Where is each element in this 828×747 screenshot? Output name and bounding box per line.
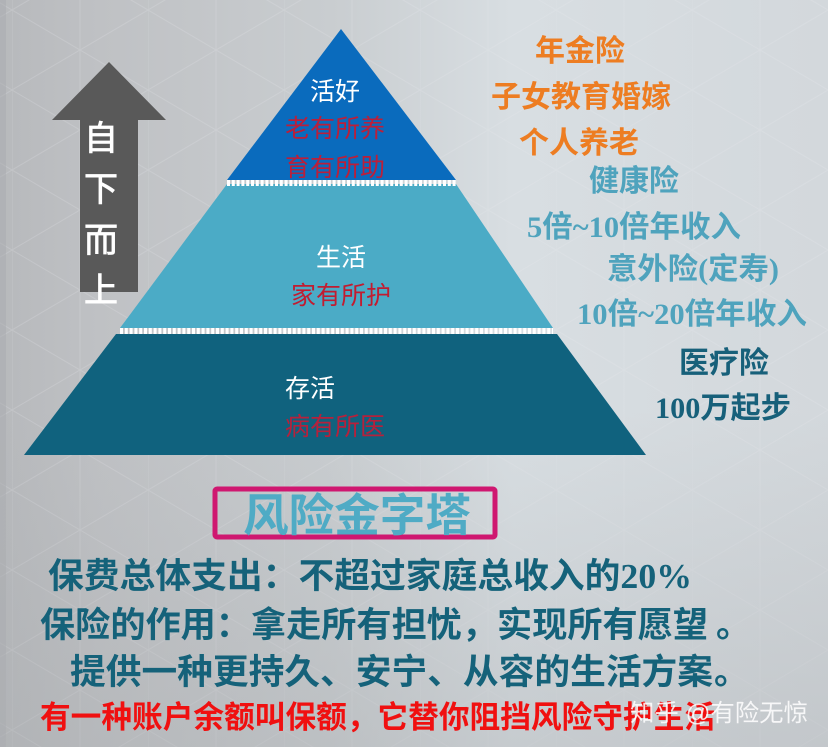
summary text: 。 xyxy=(716,606,751,645)
summary text: 提供一种更持久、安宁、从容的生活方案 xyxy=(70,653,713,692)
accident insurance labels xyxy=(577,253,807,331)
tier: bottom xyxy=(24,334,646,455)
arrow: bottom to top xyxy=(52,62,166,310)
summary text: 保费总体支出：不超过家庭总收入的20% xyxy=(48,557,692,596)
tier: middle: 生活 xyxy=(316,244,366,272)
annuity labels: 子女教育婚嫁 xyxy=(491,81,671,114)
health insurance labels xyxy=(527,165,741,244)
pyramid xyxy=(24,29,646,455)
health insurance labels: 健康险 xyxy=(589,165,679,198)
title box: 风险金字塔 xyxy=(243,490,471,541)
tier: top: 育有所助 xyxy=(285,154,385,182)
watermark: 知乎 @有险无惊 xyxy=(630,700,808,727)
arrow: bottom to top: 下 xyxy=(84,171,118,209)
accident insurance labels: 10倍~20倍年收入 xyxy=(577,298,807,331)
annuity labels xyxy=(491,35,671,160)
tier: bottom: 存活 xyxy=(285,375,335,403)
red slogan: 有一种账户余额叫保额，它替你阻挡风险守护生活 xyxy=(40,700,715,735)
dotted divider: lower xyxy=(120,328,553,334)
summary text xyxy=(40,557,751,692)
summary text: 保险的作用：拿走所有担忧，实现所有愿望 xyxy=(40,605,708,645)
health insurance labels: 5倍~10倍年收入 xyxy=(527,211,741,244)
tier: bottom: 病有所医 xyxy=(285,413,385,441)
annuity labels: 年金险 xyxy=(535,35,625,68)
medical insurance labels xyxy=(655,347,791,425)
arrow: bottom to top: 自 xyxy=(84,120,118,158)
summary text: 。 xyxy=(714,653,749,692)
arrow: bottom to top: 上 xyxy=(84,272,118,310)
tier: top xyxy=(227,29,456,182)
tier: middle: 家有所护 xyxy=(291,282,391,310)
tier: top: 活好 xyxy=(310,78,360,106)
dotted divider: upper xyxy=(227,180,456,186)
medical insurance labels: 医疗险 xyxy=(679,347,769,380)
tier: middle xyxy=(120,184,553,328)
annuity labels: 个人养老 xyxy=(519,127,639,160)
medical insurance labels: 100万起步 xyxy=(655,392,791,425)
tier: top: 老有所养 xyxy=(285,115,385,143)
arrow: bottom to top: 而 xyxy=(84,222,118,260)
accident insurance labels: 意外险(定寿) xyxy=(607,253,779,286)
